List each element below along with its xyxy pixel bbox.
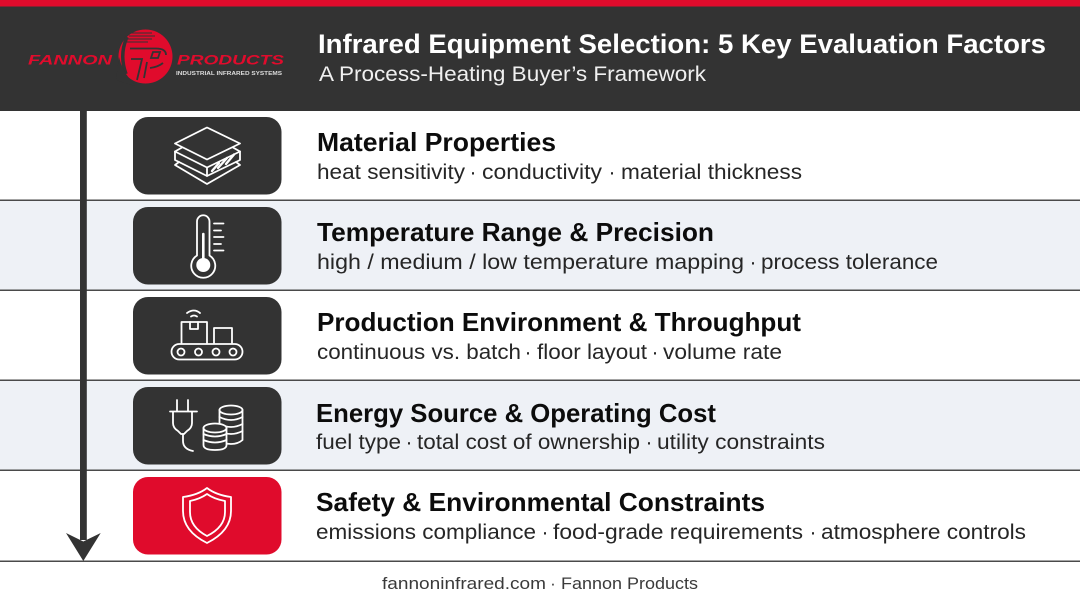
icon: thermometer	[133, 207, 282, 284]
details: ·	[750, 251, 756, 274]
details: volume rate	[663, 341, 782, 364]
details: material thickness	[621, 161, 802, 184]
heading: Material Properties	[317, 127, 556, 157]
downward arrow	[66, 110, 101, 561]
panel: production environment and throughput	[133, 297, 801, 374]
details: ·	[646, 431, 652, 454]
details: ·	[810, 521, 816, 544]
logo: Fannon Products: PRODUCTS	[177, 52, 284, 68]
details	[317, 251, 938, 274]
icon: material layers	[133, 117, 282, 194]
details	[317, 161, 802, 184]
panel: material properties	[133, 117, 802, 194]
details	[317, 341, 782, 364]
title: Infrared Equipment Selection: 5 Key Evaluation Factors	[318, 29, 1046, 59]
details: fuel type	[316, 431, 401, 454]
heading: Energy Source & Operating Cost	[316, 398, 716, 428]
details: utility constraints	[657, 431, 825, 454]
icon: plug and coins	[133, 387, 282, 464]
subtitle: A Process-Heating Buyer’s Framework	[319, 63, 707, 86]
icon: conveyor	[133, 297, 282, 374]
details: continuous vs. batch	[317, 341, 521, 364]
footer	[382, 574, 698, 593]
details	[316, 521, 1026, 544]
details: high / medium / low temperature mapping	[317, 251, 744, 274]
details: ·	[406, 431, 412, 454]
details: ·	[652, 341, 658, 364]
details	[316, 431, 825, 454]
details: ·	[608, 161, 616, 184]
heading: Temperature Range & Precision	[317, 217, 714, 247]
footer: ·	[550, 574, 556, 593]
panel: energy source and operating cost	[133, 387, 825, 464]
panel: temperature range and precision	[133, 207, 938, 284]
heading: Safety & Environmental Constraints	[316, 487, 765, 517]
heading: Production Environment & Throughput	[317, 307, 801, 337]
details: ·	[470, 161, 476, 184]
footer: Fannon Products	[561, 574, 698, 593]
logo: Fannon Products: INDUSTRIAL INFRARED SYSTEMS	[176, 71, 282, 77]
header band	[0, 0, 1080, 111]
details: food-grade requirements	[553, 521, 803, 544]
row bands	[0, 200, 1080, 562]
details: total cost of ownership	[417, 431, 640, 454]
logo: Fannon Products: FANNON	[28, 52, 112, 68]
logo: Fannon Products	[28, 30, 284, 86]
footer: fannoninfrared.com	[382, 574, 546, 593]
details: process tolerance	[761, 251, 938, 274]
details: conductivity	[482, 161, 603, 184]
details: atmosphere controls	[821, 521, 1026, 544]
icon: shield	[133, 477, 282, 554]
panel: safety and environmental constraints	[133, 477, 1026, 554]
details: ·	[524, 341, 532, 364]
details: ·	[542, 521, 548, 544]
details: floor layout	[537, 341, 647, 364]
details: emissions compliance	[316, 521, 536, 544]
details: heat sensitivity	[317, 161, 466, 184]
